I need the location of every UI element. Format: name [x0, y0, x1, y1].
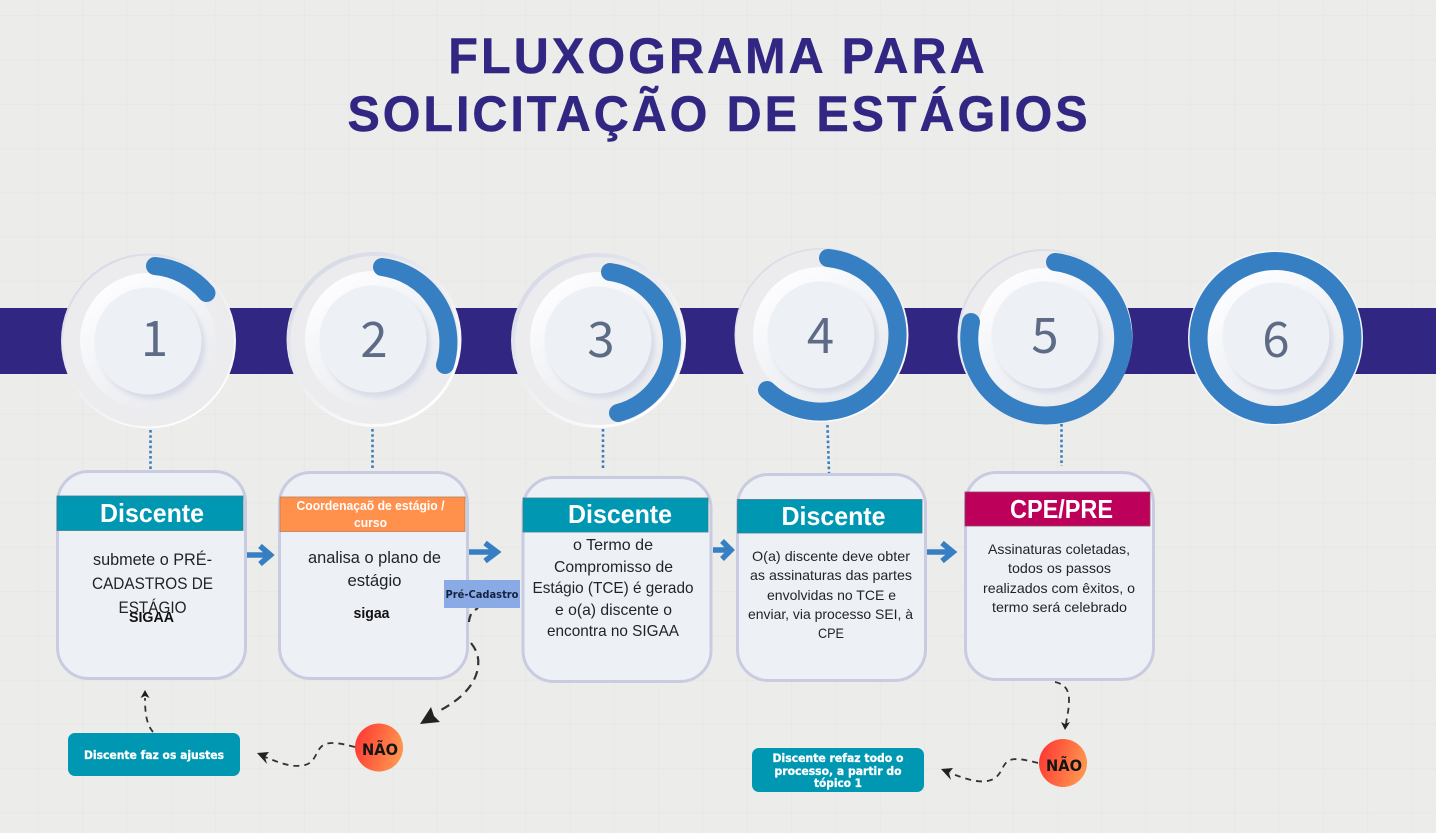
- card 1: Discente: [57, 472, 246, 678]
- card 4: Discente: O(a) discente deve obter: [752, 548, 910, 564]
- card 5: CPE/PRE: [965, 472, 1154, 680]
- step 6 dial: 6: [1262, 301, 1290, 372]
- box: discente refaz todo o processo: [752, 748, 924, 792]
- title: FLUXOGRAMA PARA: [448, 28, 985, 84]
- card 3: Discente: encontra no SIGAA: [547, 623, 679, 640]
- card 5: CPE/PRE: Assinaturas coletadas,: [988, 541, 1130, 557]
- arrow: step 2 to 3: [469, 543, 497, 561]
- card 1: Discente: submete o PRÉ-: [93, 550, 212, 569]
- step 3 dial: [511, 253, 686, 428]
- card 5: CPE/PRE: realizados com êxitos, o: [983, 580, 1135, 596]
- dashed arrow: pré-cadastro to não: [420, 608, 478, 724]
- card 5: CPE/PRE: todos os passos: [1008, 560, 1111, 576]
- step 4 dial: [734, 248, 908, 422]
- step 4 dial: 4: [807, 297, 834, 368]
- card 1: Discente: Discente: [100, 498, 204, 528]
- card 1: Discente: ESTÁGIO: [118, 598, 186, 617]
- step 6 dial: [1188, 250, 1363, 426]
- card 2: Coordenação: sigaa: [354, 606, 390, 622]
- card 2: Coordenação: curso: [354, 516, 387, 530]
- card 3: Discente: Estágio (TCE) é gerado: [532, 580, 694, 597]
- card 5: CPE/PRE: termo será celebrado: [992, 599, 1127, 615]
- badge: não 2: NÃO: [1046, 756, 1082, 775]
- card 4: Discente: CPE: [818, 625, 844, 641]
- box: discente faz os ajustes: Discente faz os ajustes: [84, 748, 224, 762]
- card 2: Coordenação: analisa o plano de: [308, 548, 441, 567]
- title: [347, 28, 1088, 142]
- badge: não 1: [355, 724, 403, 772]
- dashed arrow: não to refaz: [941, 759, 1038, 781]
- card 4: Discente: as assinaturas das partes: [750, 567, 912, 583]
- box: discente refaz todo o processo: tópico 1: [814, 776, 862, 790]
- card 2: Coordenação: [280, 472, 468, 678]
- timeline band: [0, 308, 1436, 374]
- card 1: Discente: SIGAA: [129, 610, 175, 626]
- card 3: Discente: [523, 478, 711, 682]
- tag: Pré-Cadastro: [444, 580, 520, 608]
- box: discente faz os ajustes: [68, 733, 240, 776]
- step 2 dial: [286, 252, 462, 427]
- step 3 dial: 3: [587, 301, 615, 372]
- card 3: Discente: o Termo de: [573, 537, 653, 554]
- card 2: Coordenação: Coordenaçaõ de estágio /: [296, 499, 445, 513]
- arrow: step 4 to 5: [927, 543, 953, 561]
- step 1 dial: 1: [141, 300, 168, 371]
- step 1 dial: [61, 254, 236, 428]
- card 5: CPE/PRE: CPE/PRE: [1010, 494, 1113, 524]
- dashed arrow: não to ajustes: [257, 743, 355, 766]
- card 3: Discente: Compromisso de: [554, 559, 673, 576]
- card 4: Discente: Discente: [782, 501, 886, 531]
- box: discente refaz todo o processo: Discente refaz todo o: [772, 751, 904, 765]
- arrow: step 1 to 2: [247, 546, 270, 564]
- title: SOLICITAÇÃO DE ESTÁGIOS: [347, 85, 1088, 142]
- badge: não 2: [1039, 739, 1087, 787]
- card 4: Discente: enviar, via processo SEI, à: [748, 606, 913, 622]
- badge: não 1: NÃO: [362, 740, 398, 759]
- card 4: Discente: [738, 474, 926, 680]
- card 2: Coordenação: estágio: [348, 571, 402, 590]
- card 3: Discente: e o(a) discente o: [555, 602, 672, 619]
- card 4: Discente: envolvidas no TCE e: [767, 587, 896, 603]
- step 5 dial: 5: [1031, 297, 1059, 368]
- step 5 dial: [958, 249, 1132, 424]
- dashed arrow: card 5 to não: [1055, 682, 1070, 730]
- tag: Pré-Cadastro: Pré-Cadastro: [446, 589, 518, 601]
- dashed arrow: ajustes to card 1: [140, 690, 153, 732]
- step 2 dial: 2: [360, 301, 388, 372]
- card 3: Discente: Discente: [568, 499, 672, 529]
- card 1: Discente: CADASTROS DE: [92, 574, 213, 593]
- arrow: step 3 to 4: [713, 541, 731, 559]
- box: discente refaz todo o processo: processo, a partir do: [774, 764, 902, 778]
- connector dotted lines: [150, 424, 1062, 473]
